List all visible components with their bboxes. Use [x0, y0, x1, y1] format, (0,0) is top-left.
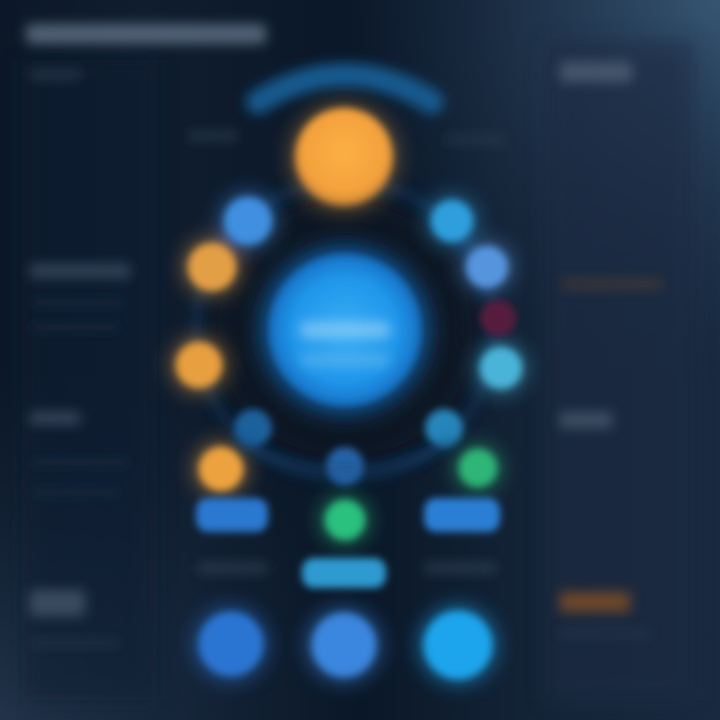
small labels in lower row: [198, 563, 496, 573]
ring connecting nodes: [197, 182, 493, 478]
left column text blocks: [30, 70, 130, 646]
satellite node glows: [170, 191, 528, 546]
bottom row node cores: [199, 611, 492, 679]
panel: right column: [545, 40, 695, 700]
bottom row nodes: [193, 605, 498, 685]
arc above top node: [258, 75, 432, 102]
central hub: [259, 244, 431, 416]
title: [26, 24, 266, 44]
panel: left column: [22, 24, 266, 700]
lower arc: [235, 440, 455, 470]
label pills: [196, 498, 500, 588]
top orange node: [288, 101, 400, 213]
satellite nodes: [176, 197, 522, 540]
small labels near top node: [188, 132, 505, 143]
